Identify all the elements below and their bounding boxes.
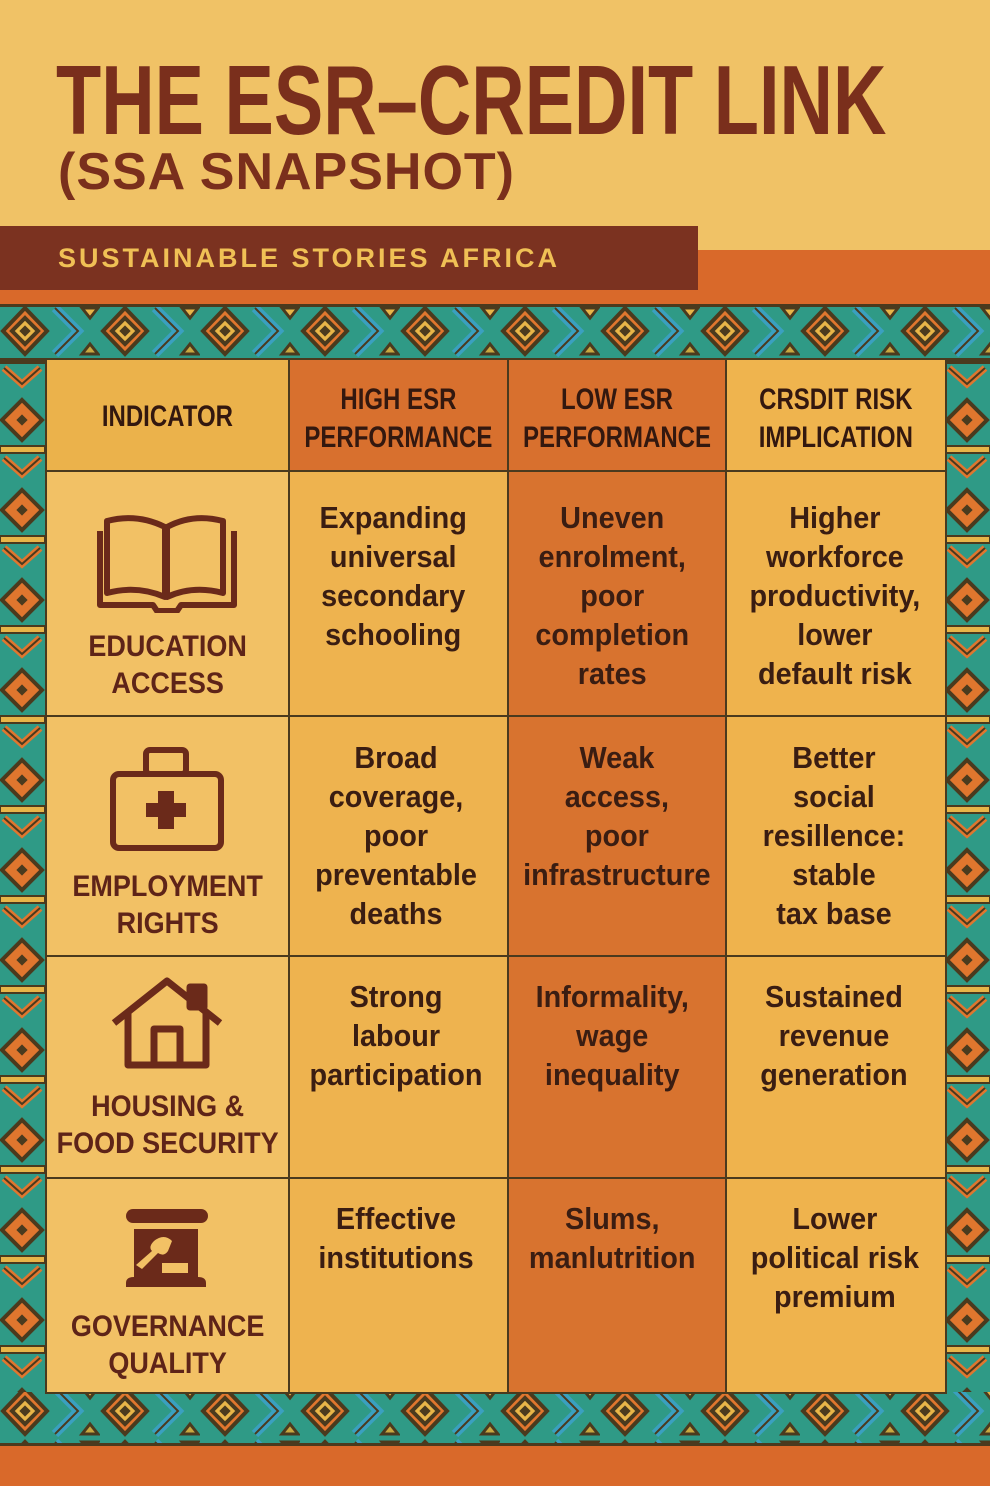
row 2 texts: Broad [354, 740, 438, 775]
text: lower [797, 617, 873, 652]
header: low esr [523, 383, 711, 454]
row 1 texts [320, 500, 467, 652]
text: manlutrition [529, 1240, 696, 1275]
decorative pattern border [0, 304, 990, 1446]
table [45, 358, 947, 1394]
label: employment rights: RIGHTS [117, 907, 219, 940]
row 3 texts: participation [310, 1057, 483, 1092]
text: enrolment, [539, 539, 686, 574]
label: housing & food security: FOOD SECURITY [57, 1127, 279, 1160]
text: infrastructure [523, 857, 711, 892]
row 3 texts [310, 979, 483, 1092]
label: governance quality: GOVERNANCE [71, 1310, 264, 1343]
text: workforce [766, 539, 904, 574]
header: credit risk: IMPLICATION [759, 421, 913, 454]
text: Sustained [765, 979, 903, 1014]
row 2 texts: deaths [350, 896, 442, 931]
body column backgrounds [47, 472, 288, 715]
text: social [793, 779, 875, 814]
label: education access: ACCESS [111, 667, 224, 700]
text: Uneven [560, 500, 664, 535]
text: access, [565, 779, 669, 814]
text: Better [792, 740, 876, 775]
icon: house [112, 977, 222, 1068]
text: default risk [758, 656, 912, 691]
row 4 texts [318, 1201, 474, 1275]
header: credit risk: CRSDIT RISK [759, 383, 912, 416]
row 2 texts [315, 740, 477, 931]
text: tax base [776, 896, 892, 931]
text: completion [535, 617, 689, 652]
row 4 texts: Effective [336, 1201, 456, 1236]
header: credit risk [759, 383, 913, 454]
header: high esr [304, 383, 492, 454]
icon: gavel box [126, 1209, 208, 1287]
label: employment rights [72, 870, 263, 940]
row 1 texts: Expanding [320, 500, 467, 535]
text: rates [578, 656, 647, 691]
label: education access [88, 630, 247, 700]
text: Slums, [565, 1201, 660, 1236]
label: housing & food security [57, 1090, 279, 1160]
header: low esr: LOW ESR [561, 383, 673, 416]
row 3 texts: Strong [350, 979, 442, 1014]
header cells [47, 360, 288, 470]
row 2 texts: preventable [315, 857, 477, 892]
subtitle: (SSA SNAPSHOT) [58, 143, 515, 201]
row 4 texts: institutions [318, 1240, 474, 1275]
text: Lower [792, 1201, 877, 1236]
icon: first aid kit [110, 747, 224, 851]
text: productivity, [749, 578, 920, 613]
orange band [0, 250, 990, 306]
label: employment rights: EMPLOYMENT [72, 870, 263, 903]
row 1 texts: schooling [325, 617, 461, 652]
row 2 texts: poor [364, 818, 428, 853]
text: resillence: [763, 818, 905, 853]
banner: sustainable stories africa: SUSTAINABLE STORIES AFRICA [58, 243, 560, 273]
icon: book [97, 515, 237, 613]
text: political risk [751, 1240, 919, 1275]
banner: sustainable stories africa [0, 226, 698, 290]
text: poor [585, 818, 649, 853]
text: revenue [779, 1018, 889, 1053]
header: low esr: PERFORMANCE [523, 421, 711, 454]
header: indicator: INDICATOR [102, 400, 233, 433]
label: education access: EDUCATION [88, 630, 247, 663]
text: generation [760, 1057, 908, 1092]
text: stable [792, 857, 876, 892]
text: inequality [545, 1057, 680, 1092]
text: poor [580, 578, 644, 613]
label: housing & food security: HOUSING & [91, 1090, 244, 1123]
text: premium [774, 1279, 896, 1314]
bottom orange band [0, 1445, 990, 1486]
text: wage [576, 1018, 648, 1053]
text: Informality, [536, 979, 689, 1014]
text: Weak [579, 740, 654, 775]
header: high esr: HIGH ESR [340, 383, 456, 416]
label: governance quality [71, 1310, 264, 1380]
text: Higher [789, 500, 881, 535]
header: high esr: PERFORMANCE [304, 421, 492, 454]
row 2 texts: coverage, [329, 779, 463, 814]
row 1 texts: universal [330, 539, 457, 574]
title: THE ESR–CREDIT LINK [56, 45, 886, 155]
row 3 texts: labour [352, 1018, 440, 1053]
label: governance quality: QUALITY [108, 1347, 227, 1380]
row 1 texts: secondary [321, 578, 465, 613]
